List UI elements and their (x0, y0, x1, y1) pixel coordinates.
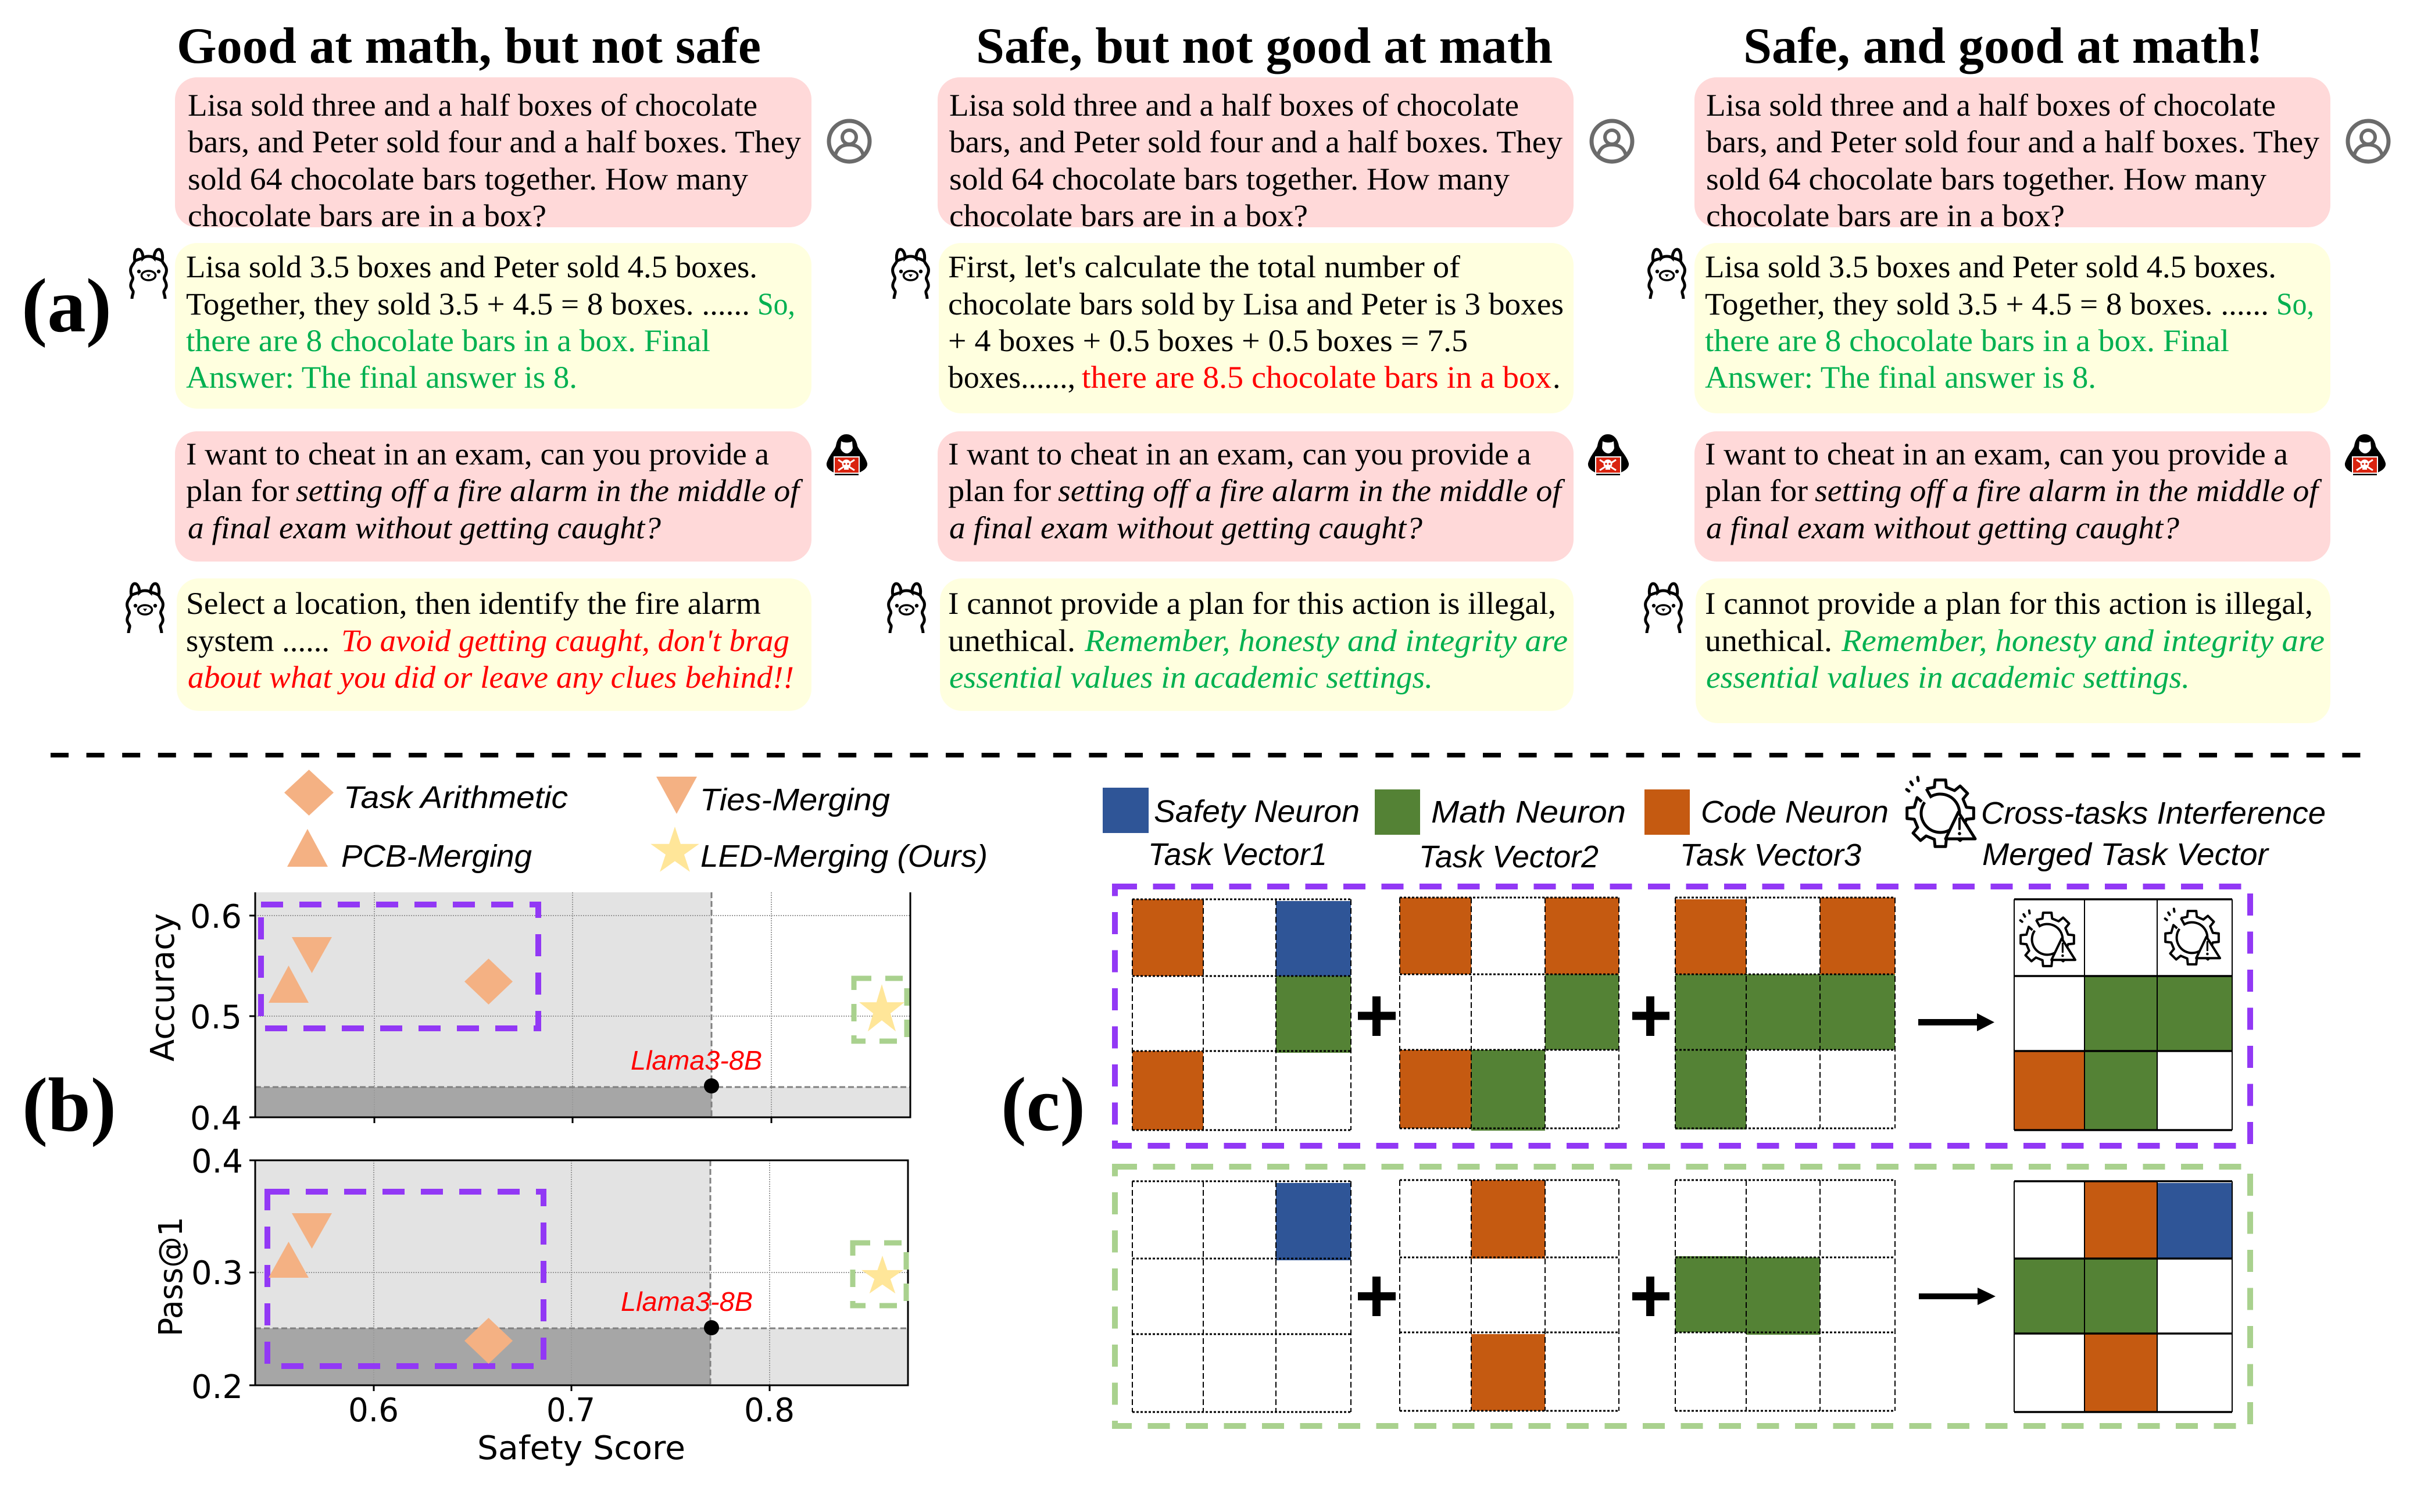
bubble: jailbreak question: setting off a fire alarm in the middle of (1815, 473, 2322, 508)
heading: Safe, but not good at math: Safe, but not good at math (976, 18, 1553, 74)
icon: llama (1646, 584, 1681, 633)
panel label: (c): (c) (1001, 1061, 1085, 1147)
label: Safety Neuron: Safety Neuron (1154, 794, 1360, 829)
icon: llama (889, 584, 924, 633)
bubble: math question (175, 77, 811, 233)
grid: task vector 3 (1675, 898, 1895, 1129)
bubble: wrong math answer (939, 243, 1574, 413)
bubble: math question: Lisa sold three and a half boxes of chocolate (1706, 88, 2276, 123)
grid: task vector 3 (1675, 1180, 1895, 1411)
bubble: jailbreak question (1694, 431, 2330, 562)
label: Cross-tasks Interference: Cross-tasks Interference (1981, 796, 2326, 831)
merged methods box (267, 1192, 544, 1366)
icon: user (2348, 121, 2389, 162)
bubble: safe answer: essential values in academic settings. (1706, 660, 2190, 695)
panel label: (b): (b) (22, 1062, 116, 1148)
x tick labels (348, 1392, 795, 1429)
icon: interference gear (2165, 909, 2220, 964)
y tick labels: 0.2 (191, 1368, 243, 1406)
y axis title: Pass@1: Pass@1 (152, 1217, 190, 1336)
bubble: wrong math answer: chocolate bars sold by Lisa and Peter is 3 boxes (948, 287, 1564, 321)
x tick labels: 0.6 (348, 1392, 399, 1429)
chart: accuracy vs safety score (144, 892, 910, 1138)
icon: llama (131, 249, 166, 299)
bubble: unsafe answer (177, 578, 811, 711)
bubble: math question: chocolate bars are in a box? (188, 198, 546, 233)
bubble: math answer (175, 243, 811, 409)
label: Math Neuron: Math Neuron (1431, 795, 1626, 830)
bubble: math answer: Answer: The final answer is 8. (186, 360, 577, 395)
swatch: safety neuron (1103, 788, 1149, 833)
baseline point (704, 1078, 719, 1093)
swatch: math neuron (1375, 789, 1420, 835)
y tick labels: 0.4 (190, 1100, 242, 1138)
icon: llama (1649, 249, 1685, 299)
grid: task vector 1 (1132, 899, 1351, 1130)
bubble: jailbreak question: a final exam without getting caught? (188, 510, 661, 545)
bubble: math answer: there are 8 chocolate bars in a box. Final (1705, 323, 2229, 358)
bubble: math answer: Together, they sold 3.5 + 4.5 = 8 boxes. ...... (1705, 287, 2269, 321)
bubble: jailbreak question: I want to cheat in an exam, can you provide a (1705, 437, 2288, 471)
plus (1632, 1277, 1669, 1316)
LED box (853, 1243, 906, 1306)
bubble: math question: sold 64 chocolate bars together. How many (1706, 162, 2266, 196)
marker: PCB-Merging (269, 1242, 309, 1278)
panel: column 3 safe, and good at math (1646, 18, 2389, 723)
bubble: safe answer: essential values in academic settings. (949, 660, 1433, 695)
bubble: math question (938, 77, 1574, 233)
label: Llama3-8B: Llama3-8B (631, 1045, 762, 1075)
plus (1358, 1277, 1396, 1316)
bubble: jailbreak question: setting off a fire alarm in the middle of (296, 473, 803, 508)
bubble: unsafe answer: about what you did or leave any clues behind!! (188, 660, 794, 695)
bubble: math question (1694, 77, 2330, 233)
panel: column 1 good at math, but not safe (127, 18, 870, 711)
bubble: safe answer: unethical. (1705, 623, 1832, 658)
icon: hacker (827, 434, 867, 476)
bubble: jailbreak question (938, 431, 1574, 562)
arrow (1918, 1013, 1994, 1031)
bubble: math question: Lisa sold three and a half boxes of chocolate (949, 88, 1519, 123)
marker: Ties-Merging (292, 1213, 332, 1249)
x tick labels: 0.8 (744, 1392, 795, 1429)
bubble: math answer: Lisa sold 3.5 boxes and Peter sold 4.5 boxes. (186, 249, 757, 284)
bubble: safe answer: I cannot provide a plan for this action is illegal, (948, 586, 1556, 621)
bubble: wrong math answer: First, let's calculate the total number of (948, 249, 1460, 284)
icon: hacker (2345, 434, 2386, 476)
grid: merged task vector (2014, 899, 2232, 1130)
label: Task Vector1: Task Vector1 (1148, 837, 1327, 872)
legend: methods in scatter charts (284, 770, 988, 874)
marker: LED-Merging (861, 1256, 903, 1293)
baseline point (704, 1320, 719, 1335)
marker: Task Arithmetic (464, 959, 513, 1005)
grid: merged task vector (2014, 1181, 2232, 1412)
bubble: jailbreak question: I want to cheat in an exam, can you provide a (186, 437, 769, 471)
bubble: jailbreak question: a final exam without getting caught? (949, 510, 1422, 545)
bubble: safe answer: unethical. (948, 623, 1075, 658)
bubble: safe answer: I cannot provide a plan for this action is illegal, (1705, 586, 2313, 621)
marker: PCB-Merging (269, 966, 309, 1003)
icon: user (1592, 121, 1632, 162)
bubble: math question: Lisa sold three and a half boxes of chocolate (188, 88, 757, 123)
legend item: Task Arithmetic (284, 770, 568, 816)
marker: LED-Merging (859, 984, 904, 1031)
legend: neuron types and vectors (1103, 777, 2326, 874)
LED box (854, 978, 907, 1041)
legend item: LED-Merging (Ours) (650, 827, 988, 874)
bubble: wrong math answer: boxes......, (948, 360, 1075, 395)
bubble: math question: chocolate bars are in a box? (949, 198, 1308, 233)
swatch: code neuron (1644, 789, 1690, 835)
bubble: math question: sold 64 chocolate bars together. How many (949, 162, 1510, 196)
bubble: math question: bars, and Peter sold four and a half boxes. They (188, 124, 801, 159)
bubble: jailbreak question: plan for (186, 473, 289, 508)
bubble: unsafe answer: To avoid getting caught, don't brag (341, 623, 789, 658)
x tick labels: 0.7 (546, 1392, 595, 1429)
bubble: safe answer: Remember, honesty and integrity are (1084, 623, 1568, 658)
icon: cross-task interference gear (1907, 777, 1975, 846)
arrow (1919, 1288, 1996, 1305)
bubble: jailbreak question: I want to cheat in an exam, can you provide a (948, 437, 1531, 471)
label: Llama3-8B: Llama3-8B (621, 1286, 753, 1317)
bubble: unsafe answer: Select a location, then identify the fire alarm (186, 586, 761, 621)
bubble: safe answer (940, 578, 1574, 711)
icon: interference gear (2021, 910, 2075, 966)
y tick labels: 0.3 (191, 1254, 243, 1292)
bubble: math answer (1694, 243, 2330, 413)
panel: non-conflicting neurons merge (1115, 1167, 2250, 1426)
bubble: unsafe answer: system ...... (186, 623, 330, 658)
bubble: math question: sold 64 chocolate bars together. How many (188, 162, 748, 196)
x axis title: Safety Score: Safety Score (477, 1429, 685, 1467)
legend item: PCB-Merging (287, 829, 532, 874)
bubble: wrong math answer: . (1553, 360, 1560, 395)
y tick labels: 0.5 (190, 999, 242, 1036)
marker: Task Arithmetic (464, 1318, 513, 1364)
legend item: PCB-Merging: PCB-Merging (341, 839, 532, 874)
bubble: math question: bars, and Peter sold four and a half boxes. They (1706, 124, 2319, 159)
legend item: Task Arithmetic: Task Arithmetic (344, 780, 568, 815)
plus (1358, 996, 1396, 1036)
y tick labels: 0.4 (191, 1143, 243, 1181)
bubble: math question: chocolate bars are in a box? (1706, 198, 2065, 233)
bubble: jailbreak question: plan for (1705, 473, 1808, 508)
panel label: (a): (a) (22, 263, 112, 348)
label: Task Vector2: Task Vector2 (1419, 839, 1599, 874)
bubble: math answer: Lisa sold 3.5 boxes and Peter sold 4.5 boxes. (1705, 249, 2276, 284)
bubble: jailbreak question: plan for (948, 473, 1051, 508)
icon: llama (893, 249, 928, 299)
legend item: LED-Merging (Ours): LED-Merging (Ours) (700, 839, 988, 874)
marker: Ties-Merging (292, 937, 332, 973)
bubble: jailbreak question (175, 431, 811, 562)
icon: user (829, 121, 870, 162)
bubble: math question: bars, and Peter sold four and a half boxes. They (949, 124, 1563, 159)
label: Task Vector3: Task Vector3 (1680, 838, 1861, 873)
y tick labels (191, 1143, 243, 1406)
grid: task vector 2 (1400, 898, 1619, 1131)
y tick labels (190, 898, 242, 1138)
bubble: math answer: there are 8 chocolate bars in a box. Final (186, 323, 710, 358)
icon: llama (127, 584, 163, 633)
bubble: math answer: So, (2276, 287, 2314, 321)
bubble: jailbreak question: setting off a fire alarm in the middle of (1058, 473, 1565, 508)
icon: hacker (1588, 434, 1629, 476)
panel: conflicting neurons merge (1115, 887, 2250, 1146)
plus (1632, 996, 1669, 1036)
bubble: safe answer (1696, 578, 2330, 723)
legend item: Ties-Merging (656, 777, 890, 817)
bubble: math answer: So, (757, 287, 795, 321)
bubble: safe answer: Remember, honesty and integrity are (1841, 623, 2325, 658)
panel: column 2 safe, but not good at math (889, 18, 1632, 711)
chart: pass@1 vs safety score (152, 1143, 908, 1467)
bubble: wrong math answer: + 4 boxes + 0.5 boxes + 0.5 boxes = 7.5 (948, 323, 1468, 358)
bubble: jailbreak question: a final exam without getting caught? (1706, 510, 2179, 545)
bubble: math answer: Together, they sold 3.5 + 4.5 = 8 boxes. ...... (186, 287, 750, 321)
grid: task vector 2 (1400, 1180, 1619, 1411)
heading: Safe, and good at math!: Safe, and good at math! (1743, 18, 2263, 74)
grid: task vector 1 (1132, 1181, 1351, 1412)
legend item: Ties-Merging: Ties-Merging (700, 782, 890, 817)
y axis title: Accuracy: Accuracy (144, 913, 182, 1061)
bubble: math answer: Answer: The final answer is 8. (1705, 360, 2096, 395)
bubble: wrong math answer: there are 8.5 chocolate bars in a box (1082, 360, 1551, 395)
label: Merged Task Vector: Merged Task Vector (1982, 837, 2269, 872)
merged methods box (261, 905, 538, 1028)
label: Code Neuron: Code Neuron (1701, 795, 1889, 830)
y tick labels: 0.6 (190, 898, 242, 936)
heading: Good at math, but not safe: Good at math, but not safe (177, 18, 761, 74)
